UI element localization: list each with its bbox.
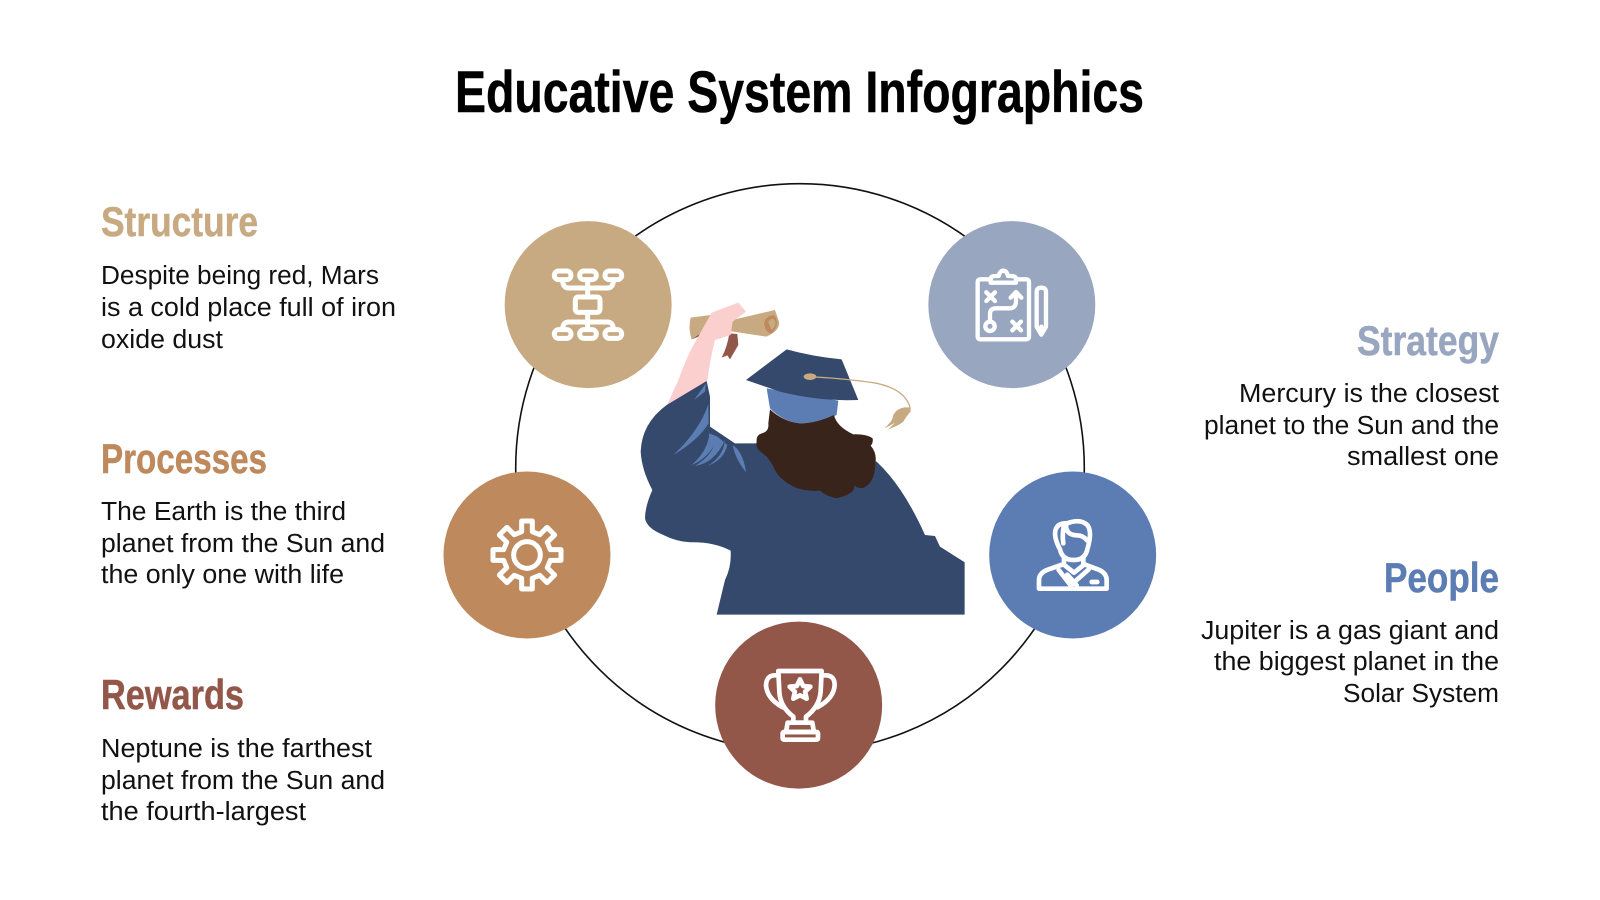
panel: processes text (101, 435, 385, 589)
text block: structure: is a cold place full of iron (101, 294, 396, 322)
panel: strategy text (1204, 317, 1500, 471)
text block: structure (101, 262, 396, 354)
text block: processes: The Earth is the third (101, 498, 346, 526)
text block: rewards: planet from the Sun and (101, 767, 385, 795)
cap (746, 349, 858, 400)
text block: structure: oxide dust (101, 326, 223, 354)
circle icon: rewards trophy (715, 622, 882, 789)
circle icon: strategy (928, 221, 1095, 388)
text block: people (1201, 617, 1499, 708)
text block: rewards: Neptune is the farthest (101, 735, 372, 763)
text block: people: Solar System (1343, 680, 1499, 708)
text block: strategy: smallest one (1347, 443, 1499, 471)
head band (767, 388, 838, 423)
heading: rewards: Rewards (101, 671, 244, 718)
arm (667, 303, 746, 406)
circle icon: people person (989, 471, 1156, 638)
heading: processes: Processes (101, 435, 267, 482)
heading: strategy: Strategy (1357, 317, 1500, 364)
text block: processes: the only one with life (101, 561, 344, 589)
text block: rewards (101, 735, 385, 826)
gown folds (673, 383, 746, 472)
heading: people: People (1384, 554, 1499, 601)
ribbon (722, 333, 738, 359)
diploma scroll (690, 310, 779, 339)
tassel (804, 373, 911, 430)
hair (756, 409, 876, 498)
gown (641, 381, 965, 615)
text block: structure: Despite being red, Mars (101, 262, 379, 290)
text block: people: the biggest planet in the (1214, 648, 1499, 676)
text block: strategy: Mercury is the closest (1239, 380, 1499, 408)
circle icon: processes gear (443, 471, 610, 638)
text block: strategy (1204, 380, 1499, 471)
text block: processes (101, 498, 385, 589)
ring connecting the five circles (516, 184, 1084, 752)
panel: structure text (101, 198, 396, 354)
text block: people: Jupiter is a gas giant and (1201, 617, 1499, 645)
text block: strategy: planet to the Sun and the (1204, 412, 1499, 440)
panel: rewards text (101, 671, 385, 826)
title: Educative System Infographics (455, 60, 1144, 125)
heading: structure: Structure (101, 198, 258, 245)
panel: people text (1201, 554, 1499, 708)
text block: rewards: the fourth-largest (101, 798, 306, 826)
illustration: graduate holding diploma (641, 303, 965, 615)
circle icon: structure (505, 221, 672, 388)
text block: processes: planet from the Sun and (101, 530, 385, 558)
